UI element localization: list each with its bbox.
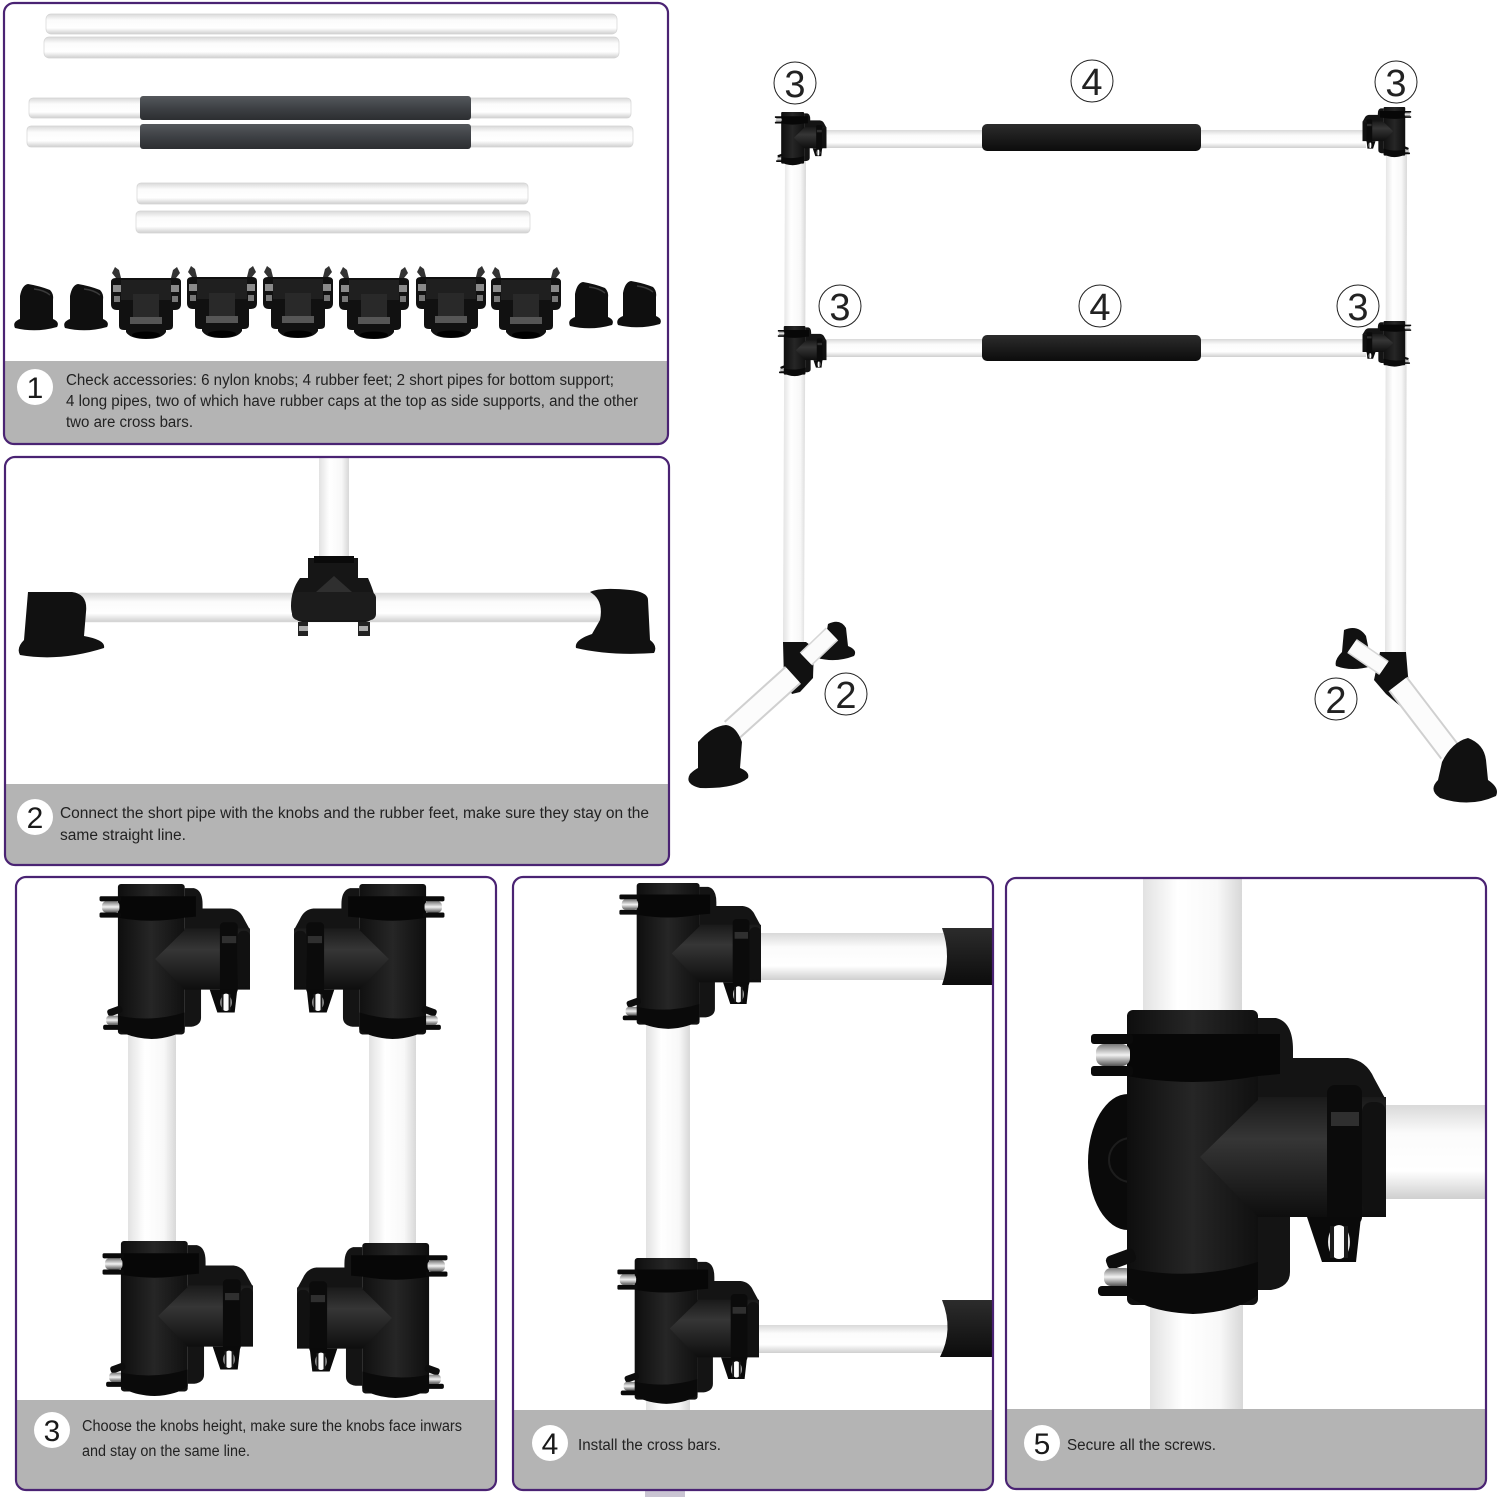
caption 3: Choose the knobs height, make sure the knobs face inwars [82,1418,462,1435]
plain long pipes [44,14,619,58]
main assembled barre: 2 [1325,680,1347,722]
caption 5 [1006,1409,1486,1488]
caption 1: 4 long pipes, two of which have rubber caps at the top as side supports, and the other [66,393,638,410]
close-up knob [1088,1010,1386,1314]
four knobs [100,884,447,1398]
panel 1: accessories [4,3,668,444]
caption 4: Install the cross bars. [578,1437,721,1454]
number callouts [774,60,1417,720]
main assembled barre [688,60,1497,803]
rubber feet [14,281,661,330]
short pipes [136,183,530,233]
main assembled barre: 3 [784,64,806,106]
frame knobs [775,107,1411,376]
base right [1352,646,1497,803]
back base feet [817,622,1372,669]
pipes with rubber caps [27,96,633,149]
cross bars [820,124,1366,361]
posts [783,160,806,645]
caption 4: 4 [542,1428,558,1461]
knobs [617,883,761,1404]
caption 5: Secure all the screws. [1067,1437,1216,1454]
caption 1: Check accessories: 6 nylon knobs; 4 rubber feet; 2 short pipes for bottom support; [66,372,614,389]
feet and tee [19,556,655,657]
panel 2: base assembly [5,457,669,865]
caption 2: Connect the short pipe with the knobs and the rubber feet, make sure they stay on the [60,805,649,822]
main assembled barre: 4 [1089,287,1111,329]
caption 4 [513,1410,993,1489]
main assembled barre: 3 [829,287,851,329]
main assembled barre: 4 [1081,62,1103,104]
caption 1: 1 [27,372,43,405]
main assembled barre: 3 [1385,63,1407,105]
caption 1 [4,361,668,443]
caption 3: 3 [44,1415,60,1448]
caption 2 [5,784,669,864]
caption 2: same straight line. [60,827,186,844]
main assembled barre: 3 [1347,287,1369,329]
caption 3 [16,1400,496,1489]
main assembled barre: 2 [835,675,857,717]
nylon knobs [111,266,561,339]
caption 2: 2 [27,802,43,835]
caption 3: and stay on the same line. [82,1443,250,1460]
panel 4: cross bars [513,877,993,1497]
caption 5: 5 [1034,1428,1050,1461]
bar caps [940,928,992,1357]
caption 1: two are cross bars. [66,414,193,431]
panel 5: secure screws [1006,878,1486,1489]
base left [688,634,832,788]
panel 3: choose knob height [16,877,496,1490]
